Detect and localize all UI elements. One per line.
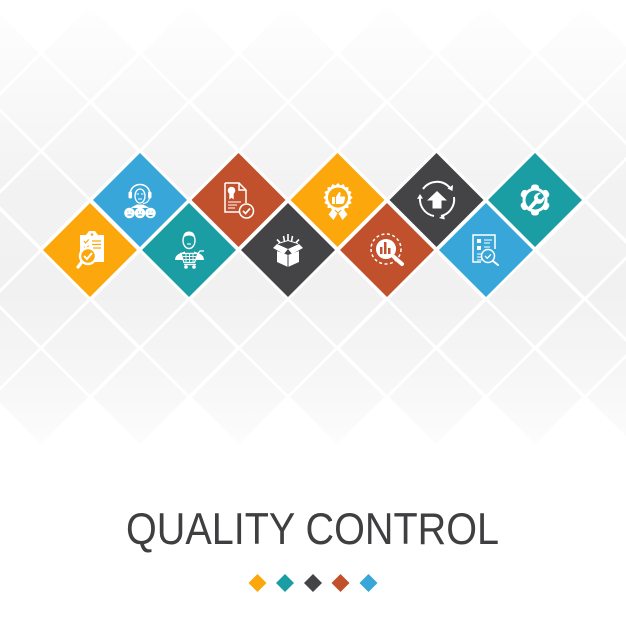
- title: QUALITY CONTROL: [126, 505, 499, 554]
- step 5: dark diamond with open box: [241, 203, 335, 297]
- step 7: red diamond with data magnifier: [340, 203, 434, 297]
- step 3: teal diamond with customer and cart: [142, 203, 236, 297]
- icon: award badge with thumbs up: [323, 183, 353, 220]
- icon: circular arrows around up arrow: [417, 182, 454, 220]
- step 1: orange diamond with clipboard and magnifier: [43, 203, 137, 297]
- icon: customer with shopping cart: [175, 232, 204, 269]
- background diamond pattern: [0, 6, 626, 444]
- icon: headset agent with smileys: [124, 184, 156, 218]
- step 10: teal diamond with gear and wrench: [488, 153, 582, 247]
- icon: magnifier with bar chart: [371, 234, 402, 264]
- icon: checklist with magnifier: [473, 235, 498, 265]
- icon: clipboard with magnifier: [78, 231, 104, 267]
- step 9: blue diamond with checklist and magnifier: [439, 203, 533, 297]
- icon: gear with wrench: [520, 184, 550, 216]
- colour key diamonds: [248, 574, 378, 592]
- step 2: blue diamond with support agent: [93, 153, 187, 247]
- icon: certificate document with check: [225, 183, 254, 218]
- icon: open box with rays: [273, 234, 303, 267]
- step 6: orange diamond with thumbs-up badge: [290, 153, 384, 247]
- step 8: dark diamond with upgrade arrows: [390, 153, 484, 247]
- step 4: red diamond with certificate: [192, 153, 286, 247]
